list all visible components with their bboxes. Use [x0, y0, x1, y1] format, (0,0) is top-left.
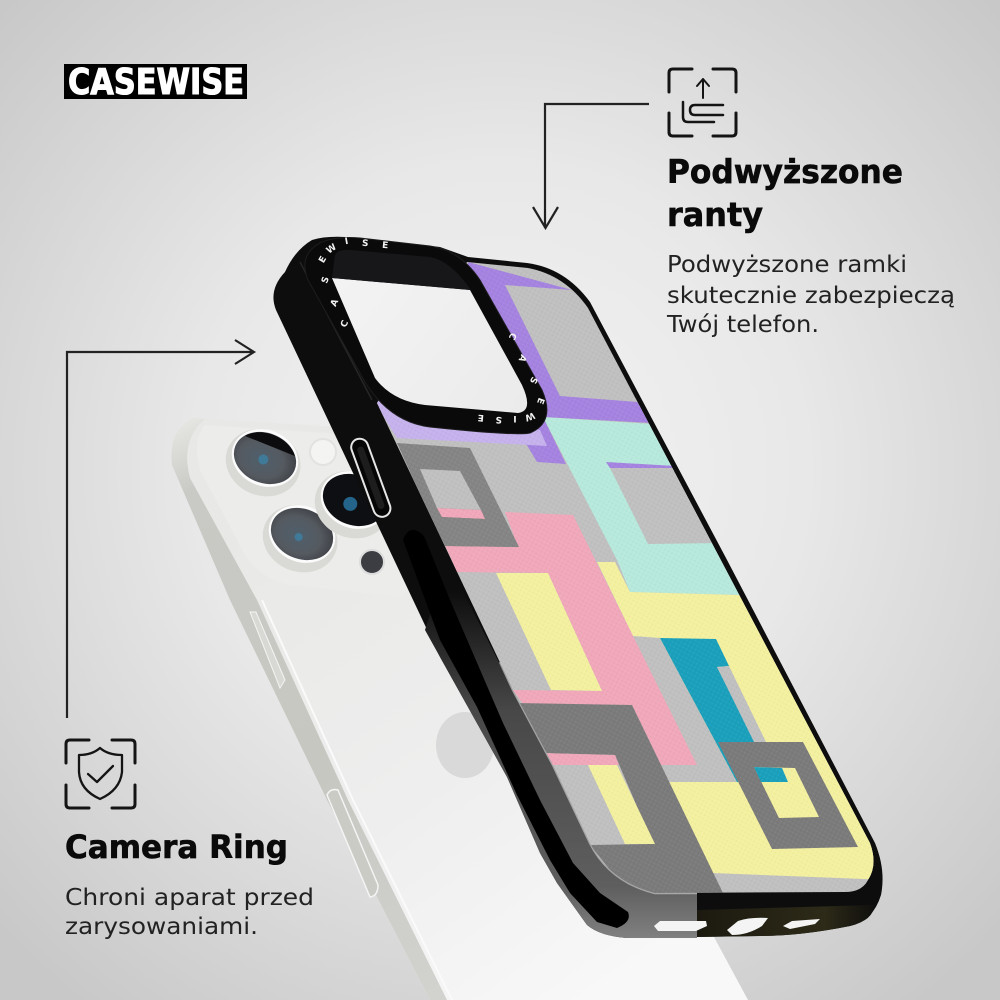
ring lettering: S [527, 375, 539, 385]
grey inset [610, 468, 722, 544]
phone body [171, 418, 748, 1000]
thin purple strip [606, 462, 678, 470]
volume button [349, 436, 393, 519]
text: raised edges description [666, 252, 955, 338]
phone side frame [171, 418, 447, 1000]
phone case [273, 237, 890, 938]
text: camera ring description: zarysowaniami. [65, 914, 258, 940]
ring lettering [317, 237, 546, 424]
text: camera ring description: Chroni aparat przed [65, 885, 314, 911]
pink block [445, 512, 697, 765]
ring lettering: A [329, 298, 341, 308]
right square yellow inset [754, 767, 819, 818]
charging port and speaker cutouts [654, 918, 820, 935]
right dark square [718, 742, 858, 849]
side slot and black core of the wall [403, 530, 629, 928]
ring lettering: E [534, 396, 546, 405]
teal block [660, 638, 754, 782]
case bottom wall [697, 905, 874, 937]
ring lettering: S [495, 414, 502, 424]
heading: raised edges: Podwyższone [667, 152, 903, 191]
back artwork [370, 255, 890, 905]
ring outer [305, 238, 547, 434]
icon: raised edges [669, 69, 736, 136]
upper dark bar repeat [442, 517, 519, 547]
lower yellow block [588, 765, 655, 844]
lens 2 [253, 494, 348, 583]
text: camera ring description [65, 885, 314, 940]
case lower translucent wall [425, 560, 697, 938]
lilac band [372, 398, 547, 446]
text: raised edges description: Twój telefon. [666, 312, 819, 338]
purple band [468, 262, 652, 464]
lower pink bar [540, 753, 619, 765]
ring lettering: S [362, 239, 369, 249]
apple logo shadow [436, 712, 494, 778]
yellow band [597, 562, 890, 880]
lens 3 [305, 460, 400, 549]
camera plateau [197, 425, 420, 596]
ring lettering: I [344, 237, 349, 247]
side button upper [250, 612, 285, 688]
flash [310, 439, 336, 465]
camera ring [305, 237, 547, 434]
phone: white iPhone behind the case [171, 418, 748, 1000]
lens 1 [216, 418, 311, 507]
brand logo: CASEWISE [68, 62, 244, 103]
ring lettering: C [339, 319, 351, 329]
side button lower [327, 790, 378, 897]
mint block [543, 417, 740, 595]
text: raised edges description: skutecznie zabezpieczą [667, 283, 955, 309]
side highlight line [300, 262, 372, 400]
ring lettering: C [506, 331, 518, 341]
heading: camera ring: Camera Ring [65, 828, 288, 866]
ring inner lip [332, 250, 471, 290]
upper dark square [397, 443, 519, 547]
art rim highlight [500, 662, 697, 893]
yellow block [496, 573, 602, 691]
icon: camera ring shield [66, 740, 135, 808]
ring lettering: S [320, 276, 332, 285]
case body [273, 237, 883, 938]
arrow: raised edges [533, 104, 649, 228]
frame highlight [262, 600, 452, 1000]
text: raised edges description: Podwyższone ramki [667, 252, 907, 278]
ring lettering: E [317, 255, 329, 265]
sensor [360, 550, 384, 574]
heading: raised edges [667, 152, 903, 234]
heading: raised edges: ranty [667, 195, 763, 234]
right square teal corner [754, 767, 788, 782]
ring lettering: A [516, 353, 528, 363]
ring lettering: E [382, 241, 389, 251]
ring lettering: I [513, 413, 517, 423]
ring lettering: W [325, 242, 339, 256]
ring opening [332, 278, 527, 413]
lower dark square [515, 703, 723, 895]
grey strip over teal [717, 666, 766, 742]
upper small pink bar [437, 508, 485, 519]
ring lettering: W [523, 409, 536, 422]
weave texture [370, 255, 890, 905]
ring lettering: E [477, 412, 484, 422]
arrow: camera ring [67, 340, 254, 718]
